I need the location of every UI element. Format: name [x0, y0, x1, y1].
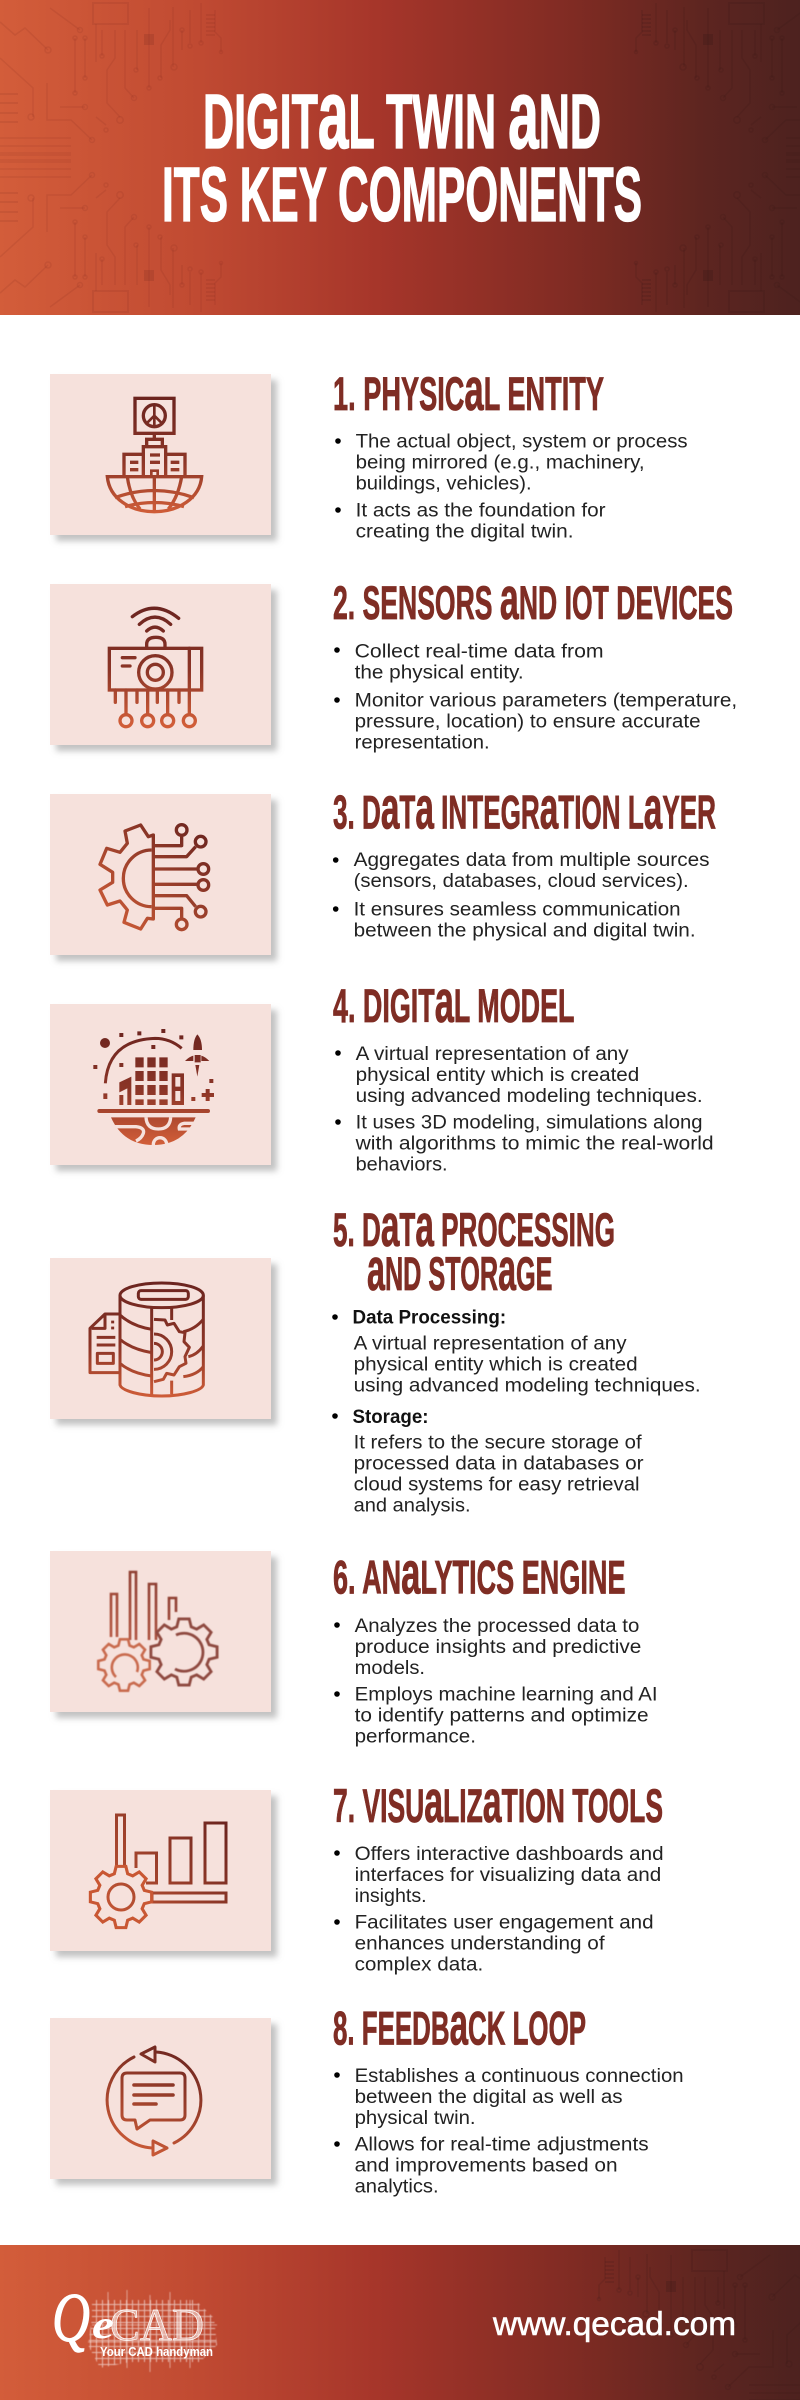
panel: 2. sensors and iot devices	[50, 565, 737, 753]
icon: chart and gear	[50, 1790, 277, 1957]
bullet list: Employs machine learning and AI	[355, 1684, 658, 1705]
bullet list: Collect real-time data from	[355, 641, 604, 662]
heading: 3. DaTa INTEGRaTION LaYER	[333, 774, 716, 841]
panel: 8. feedback loop	[50, 1990, 684, 2197]
logo: QeCAD	[52, 2280, 217, 2372]
bullet list: interfaces for visualizing data and	[355, 1865, 661, 1886]
bullet list	[332, 1308, 701, 1516]
icon: wireless sensor	[50, 584, 277, 751]
bullet list: produce insights and predictive	[355, 1637, 641, 1658]
bullet list: using advanced modeling techniques.	[354, 1375, 701, 1396]
bullet list: enhances understanding of	[355, 1933, 605, 1954]
title	[162, 59, 642, 238]
bullet list: performance.	[355, 1726, 476, 1747]
panel: 3. data integration layer	[50, 774, 716, 961]
footer banner	[0, 2245, 800, 2400]
heading	[333, 1192, 615, 1303]
bullet list	[334, 1844, 664, 1975]
bullet list	[335, 1044, 714, 1175]
bullet list: Analyzes the processed data to	[355, 1616, 639, 1637]
bullet list: Data Processing:	[352, 1308, 506, 1329]
bullet list: cloud systems for easy retrieval	[354, 1474, 640, 1495]
icon: bars and gears	[50, 1551, 277, 1718]
panel: 5. data processing and storage	[50, 1192, 701, 1516]
panel: 6. analytics engine	[50, 1540, 658, 1747]
bullet list: models.	[355, 1658, 425, 1679]
bullet list: Monitor various parameters (temperature,	[355, 690, 737, 711]
title: DIGITaL TWIN aND	[203, 59, 601, 169]
bullet list	[333, 850, 710, 941]
heading: 4. DIGITaL MODEL	[333, 968, 574, 1035]
panel: 7. visualization tools	[50, 1768, 664, 1975]
bullet list	[335, 431, 688, 542]
icon: feedback cycle with chat bubble	[50, 2018, 277, 2185]
bullet list: It acts as the foundation for	[356, 500, 606, 521]
logo: QeCAD: Your CAD handyman	[100, 2344, 213, 2359]
website url: www.qecad.com	[492, 2305, 736, 2342]
bullet list: and analysis.	[354, 1495, 471, 1516]
bullet list	[334, 641, 737, 753]
bullet list: between the digital as well as	[355, 2087, 623, 2108]
bullet list: between the physical and digital twin.	[354, 920, 696, 941]
bullet list: using advanced modeling techniques.	[356, 1086, 703, 1107]
bullet list: creating the digital twin.	[356, 521, 574, 542]
bullet list: complex data.	[355, 1954, 483, 1975]
bullet list: buildings, vehicles).	[356, 473, 532, 494]
bullet list: Offers interactive dashboards and	[355, 1844, 664, 1865]
bullet list: The actual object, system or process	[356, 431, 688, 452]
logo: QeCAD: e	[92, 2302, 114, 2347]
bullet list: to identify patterns and optimize	[355, 1705, 649, 1726]
bullet list: being mirrored (e.g., machinery,	[356, 452, 645, 473]
bullet list: (sensors, databases, cloud services).	[354, 871, 689, 892]
bullet list: It refers to the secure storage of	[354, 1432, 642, 1453]
bullet list: Aggregates data from multiple sources	[354, 850, 710, 871]
heading: aND STORaGE	[367, 1236, 552, 1303]
bullet list: with algorithms to mimic the real-world	[354, 1133, 714, 1154]
bullet list: the physical entity.	[355, 662, 524, 683]
bullet list: processed data in databases or	[354, 1453, 644, 1474]
icon: city on globe	[50, 374, 277, 541]
heading: 5. DaTa PROCESSING	[333, 1192, 615, 1259]
heading: 1. PHYSICaL ENTITY	[333, 356, 604, 423]
bullet list: physical entity which is created	[354, 1354, 638, 1375]
logo: QeCAD: CAD	[110, 2299, 204, 2350]
bullet list: Storage:	[352, 1407, 428, 1428]
bullet list: insights.	[355, 1886, 427, 1907]
bullet list: pressure, location) to ensure accurate	[355, 711, 701, 732]
bullet list: Establishes a continuous connection	[355, 2066, 684, 2087]
icon: gear with circuit	[50, 794, 277, 961]
bullet list: Allows for real-time adjustments	[355, 2134, 649, 2155]
bullet list: representation.	[355, 732, 490, 753]
icon: database with gear	[50, 1258, 277, 1425]
bullet list: It ensures seamless communication	[354, 899, 681, 920]
bullet list: A virtual representation of any	[356, 1044, 629, 1065]
panel: 1. physical entity	[50, 356, 688, 542]
header banner	[0, 0, 800, 315]
heading: 6. ANaLYTICS ENGINE	[333, 1540, 626, 1607]
bullet list: and improvements based on	[355, 2155, 618, 2176]
bullet list: analytics.	[355, 2176, 439, 2197]
panel: 4. digital model	[50, 968, 714, 1175]
bullet list: physical entity which is created	[356, 1065, 639, 1086]
bullet list: A virtual representation of any	[354, 1333, 627, 1354]
icon: digital city	[50, 1004, 277, 1171]
heading: 7. VISUaLIZaTION TOOLS	[333, 1768, 663, 1835]
logo: QeCAD: Q	[52, 2280, 90, 2357]
bullet list	[334, 1616, 658, 1747]
bullet list: Facilitates user engagement and	[355, 1912, 654, 1933]
bullet list	[334, 2066, 684, 2197]
bullet list: behaviors.	[356, 1154, 448, 1175]
bullet list: physical twin.	[355, 2108, 476, 2129]
heading: 8. FEEDBaCK LOOP	[333, 1990, 586, 2057]
bullet list: It uses 3D modeling, simulations along	[356, 1112, 703, 1133]
